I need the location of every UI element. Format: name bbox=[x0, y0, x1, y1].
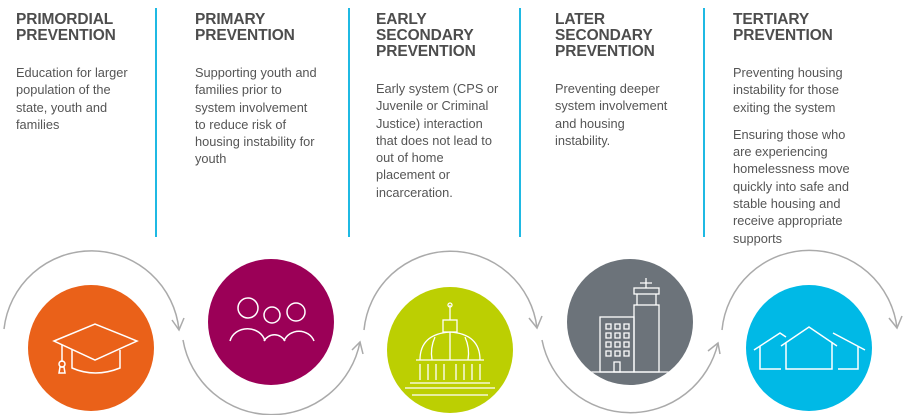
column: later secondary prevention: SECONDARY bbox=[555, 27, 653, 44]
column: early secondary prevention: PREVENTION bbox=[376, 43, 476, 60]
divider bbox=[155, 8, 156, 237]
column: tertiary prevention: TERTIARY bbox=[733, 11, 809, 28]
column: tertiary prevention: Preventing housing bbox=[733, 65, 843, 80]
column: primordial prevention: families bbox=[16, 117, 59, 132]
column: tertiary prevention: homelessness move bbox=[733, 161, 850, 176]
icons and arrows bbox=[3, 250, 903, 415]
column: primary prevention: PRIMARY bbox=[195, 11, 265, 28]
column: primary prevention: housing instability for bbox=[195, 134, 315, 149]
icon: people bbox=[208, 259, 334, 385]
column: primordial prevention: Education for larger bbox=[16, 65, 128, 80]
column: early secondary prevention: Early system (CPS or bbox=[376, 81, 498, 96]
column: early secondary prevention: that does not lead to bbox=[376, 133, 492, 148]
column: early secondary prevention: incarceration. bbox=[376, 185, 453, 200]
column: primary prevention: Supporting youth and bbox=[195, 65, 317, 80]
column: tertiary prevention: are experiencing bbox=[733, 144, 828, 159]
column: primary prevention bbox=[195, 11, 317, 166]
column: later secondary prevention: system involvement bbox=[555, 98, 667, 113]
column: early secondary prevention: placement or bbox=[376, 167, 450, 182]
column: tertiary prevention: PREVENTION bbox=[733, 27, 833, 44]
column: tertiary prevention: stable housing and bbox=[733, 196, 840, 211]
column: early secondary prevention: out of home bbox=[376, 150, 444, 165]
column: tertiary prevention: quickly into safe and bbox=[733, 179, 849, 194]
column: later secondary prevention: and housing bbox=[555, 116, 625, 131]
column: early secondary prevention: SECONDARY bbox=[376, 27, 474, 44]
icon: houses bbox=[746, 285, 872, 411]
column: primary prevention: youth bbox=[195, 151, 226, 166]
column: primary prevention: to reduce risk of bbox=[195, 117, 286, 132]
column: early secondary prevention bbox=[376, 11, 498, 200]
column: later secondary prevention: Preventing deeper bbox=[555, 81, 660, 96]
icon: buildings bbox=[567, 259, 693, 385]
column: primordial prevention: PREVENTION bbox=[16, 27, 116, 44]
column: primordial prevention: population of the bbox=[16, 82, 111, 97]
column: primordial prevention: state, youth and bbox=[16, 100, 107, 115]
column: tertiary prevention: receive appropriate bbox=[733, 213, 843, 228]
icon: graduation cap bbox=[28, 285, 154, 411]
column: primary prevention: system involvement bbox=[195, 100, 307, 115]
column: tertiary prevention: exiting the system bbox=[733, 100, 835, 115]
column: tertiary prevention: instability for those bbox=[733, 82, 839, 97]
icon: capitol bbox=[387, 287, 513, 413]
column: primordial prevention: PRIMORDIAL bbox=[16, 11, 113, 28]
arrows bbox=[4, 250, 902, 415]
column: later secondary prevention: instability. bbox=[555, 133, 610, 148]
column: later secondary prevention: LATER bbox=[555, 11, 605, 28]
column: later secondary prevention: PREVENTION bbox=[555, 43, 655, 60]
column: tertiary prevention: Ensuring those who bbox=[733, 127, 845, 142]
column: later secondary prevention bbox=[555, 11, 668, 148]
column: early secondary prevention: EARLY bbox=[376, 11, 427, 28]
column: tertiary prevention bbox=[733, 11, 850, 246]
column: tertiary prevention: supports bbox=[733, 231, 782, 246]
column: primary prevention: PREVENTION bbox=[195, 27, 295, 44]
column: primordial prevention bbox=[16, 11, 128, 132]
column: early secondary prevention: Justice) interaction bbox=[376, 116, 483, 131]
column: primary prevention: families prior to bbox=[195, 82, 282, 97]
column: early secondary prevention: Juvenile or Criminal bbox=[376, 98, 488, 113]
